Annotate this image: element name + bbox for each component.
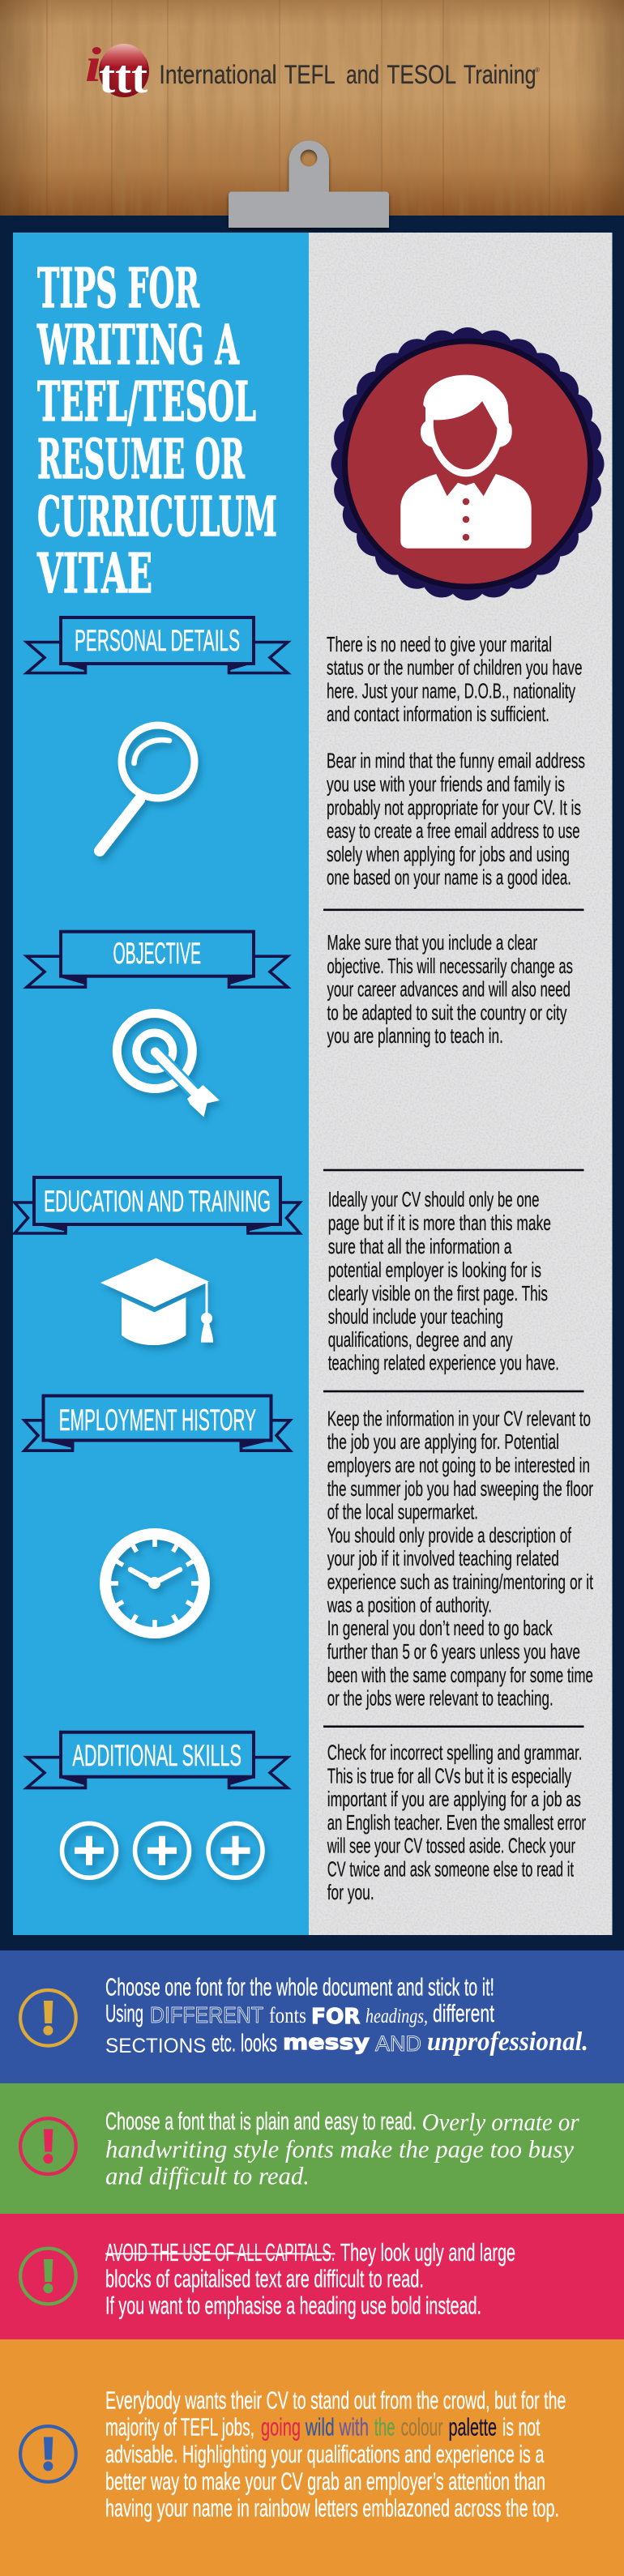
- text: colour palette: palette: [449, 2413, 497, 2441]
- text: choose a plain font: and difficult to read.: [105, 2162, 310, 2190]
- text: additional skills: [327, 1741, 586, 1904]
- ribbon: personal details: PERSONAL DETAILS: [75, 624, 240, 657]
- text: choose a plain font: handwriting style fonts make the page too busy: [105, 2135, 574, 2164]
- text: colour palette: the: [374, 2413, 395, 2441]
- title: VITAE: [36, 541, 152, 605]
- text: avoid capitals: blocks of capitalised text are difficult to read.: [105, 2264, 424, 2292]
- logo wordmark: International: [159, 60, 277, 89]
- icon: three plus signs: [62, 1823, 263, 1878]
- text: avoid capitals: [105, 2238, 515, 2320]
- icon: clock: [105, 1534, 204, 1633]
- text: colour palette: wild: [305, 2413, 335, 2441]
- text: choose one font: Using: [105, 1999, 143, 2027]
- text: additional skills: for you.: [327, 1880, 374, 1904]
- wood header background: [0, 0, 624, 216]
- logo: iTTT International TEFL and TESOL Training: [85, 38, 540, 103]
- icon: warning pink: [20, 2118, 76, 2174]
- plus 3: [208, 1823, 263, 1878]
- text: choose one font: fonts: [269, 2003, 306, 2027]
- badge: person icon: [330, 327, 605, 601]
- text: objective: you are planning to teach in.: [327, 1023, 503, 1048]
- person face: [434, 401, 497, 469]
- text: choose one font: [105, 1972, 588, 2057]
- text: employment history: of the local supermarket.: [327, 1499, 478, 1523]
- ribbon: employment history: [24, 1395, 290, 1450]
- text: choose one font: SECTIONS: [105, 2035, 206, 2057]
- ribbon: objective: [27, 932, 288, 987]
- text: education and training: sure that all the information a: [328, 1234, 512, 1258]
- navy clipboard frame: [0, 216, 624, 1950]
- text: choose one font: FOR: [311, 2005, 360, 2029]
- logo wordmark: ®: [535, 66, 540, 74]
- panel: left blue column: [13, 233, 309, 1935]
- text: choose one font: headings,: [365, 2006, 428, 2027]
- ribbon: additional skills: ADDITIONAL SKILLS: [72, 1739, 241, 1772]
- text: education and training: qualifications, degree and any: [328, 1327, 513, 1352]
- ribbon: education and training: EDUCATION AND TRAINING: [44, 1185, 271, 1218]
- ribbon: personal details: [27, 617, 288, 673]
- text: choose a plain font: Choose a font that is plain and easy to read.: [105, 2107, 417, 2135]
- plus 1: [62, 1823, 117, 1878]
- logo mark: [85, 38, 149, 103]
- panel: right paper column: [309, 233, 613, 1935]
- text: choose one font: messy: [283, 2031, 370, 2055]
- panel: fonts tip (blue): [0, 1950, 624, 2083]
- ribbon: objective: OBJECTIVE: [113, 937, 201, 970]
- text: choose one font: etc.: [212, 2029, 236, 2057]
- panel: capitals tip (pink): [0, 2214, 624, 2339]
- logo mark: ttt: [99, 50, 148, 103]
- panel: colour tip (orange): [0, 2339, 624, 2576]
- title: TIPS FOR: [37, 256, 200, 320]
- ribbon: additional skills: [27, 1732, 288, 1788]
- logo wordmark: and: [346, 60, 379, 89]
- icon: warning yellow: [20, 1990, 76, 2046]
- icon: warning blue: [20, 2426, 76, 2482]
- text: colour palette: is not: [502, 2413, 541, 2441]
- text: colour palette: colour: [401, 2413, 443, 2441]
- text: colour palette: going: [261, 2413, 301, 2441]
- text: education and training: should include your teaching: [328, 1304, 503, 1328]
- text: personal details: [327, 632, 585, 889]
- logo mark: i: [85, 38, 101, 92]
- title: CURRICULUM: [37, 485, 277, 549]
- ribbon: education and training: [15, 1177, 300, 1233]
- title: [36, 256, 277, 605]
- title: RESUME OR: [37, 427, 246, 491]
- text: choose a plain font: Overly ornate or: [422, 2108, 579, 2136]
- icon: graduation cap: [100, 1258, 213, 1345]
- icon: magnifying glass: [100, 725, 194, 851]
- text: choose one font: DIFFERENT: [150, 2002, 263, 2027]
- text: choose one font: looks: [241, 2029, 277, 2057]
- text: education and training: [328, 1187, 559, 1374]
- person head: [421, 375, 512, 476]
- person torso: [400, 474, 532, 549]
- text: employment history: was a position of authority.: [327, 1593, 492, 1617]
- logo wordmark: Training: [464, 60, 536, 89]
- icon: warning green: [20, 2249, 76, 2304]
- text: colour palette: with: [339, 2413, 369, 2441]
- logo wordmark: [159, 60, 540, 89]
- plus 2: [135, 1823, 190, 1878]
- ribbon: employment history: EMPLOYMENT HISTORY: [59, 1403, 256, 1437]
- text: avoid capitals: AVOID THE USE OF ALL CAPITALS.: [105, 2238, 336, 2266]
- title: TEFL/TESOL: [37, 370, 256, 434]
- text: colour palette: majority of TEFL jobs,: [105, 2413, 254, 2441]
- text: colour palette: [105, 2386, 566, 2523]
- text: avoid capitals: They look ugly and large: [340, 2238, 515, 2266]
- text: choose a plain font: [105, 2107, 579, 2190]
- text: employment history: [327, 1407, 594, 1710]
- title: WRITING A: [36, 313, 240, 377]
- panel: plain font tip (green): [0, 2083, 624, 2214]
- text: choose one font: unprofessional.: [427, 2027, 588, 2057]
- logo wordmark: TESOL: [387, 60, 456, 89]
- scalloped seal: [330, 327, 605, 601]
- text: objective: [327, 930, 573, 1048]
- clipboard clip: [229, 141, 389, 228]
- text: choose one font: different: [433, 1999, 494, 2027]
- text: choose one font: AND: [375, 2031, 421, 2056]
- icon: target with arrow: [117, 1013, 220, 1117]
- logo wordmark: TEFL: [284, 60, 336, 89]
- shirt buttons: [463, 498, 469, 540]
